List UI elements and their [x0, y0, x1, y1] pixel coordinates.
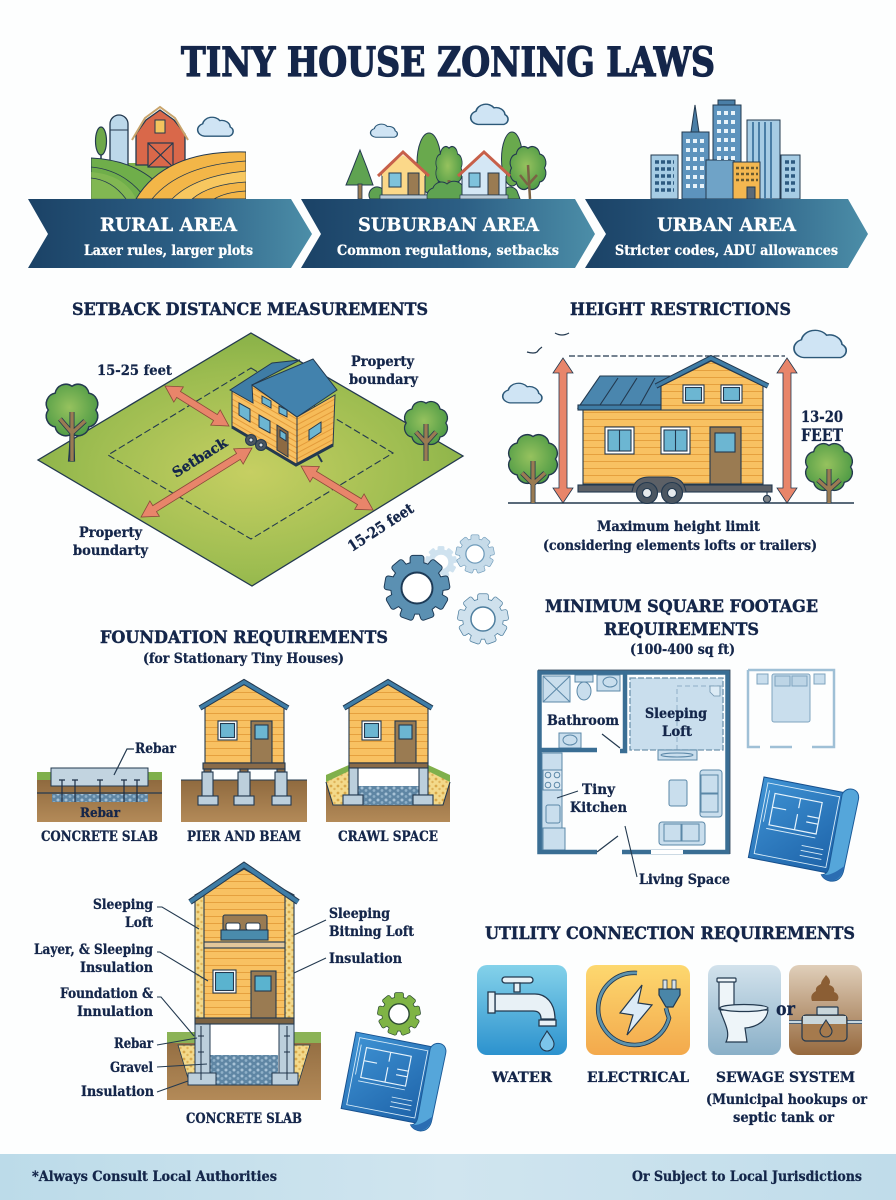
title: TINY HOUSE ZONING LAWS	[181, 39, 715, 86]
label: sewage system: septic tank or	[733, 1110, 835, 1126]
left labels	[34, 897, 154, 1100]
heading: height restrictions: HEIGHT RESTRICTIONS	[570, 300, 791, 320]
panel: crawl space foundation	[326, 682, 450, 845]
tree right	[405, 402, 447, 461]
heading: foundation requirements: (for Stationary Tiny Houses)	[143, 651, 344, 667]
ground line	[508, 502, 854, 504]
sleeping loft area	[630, 678, 723, 750]
arrow: setback top	[160, 378, 234, 434]
panel: concrete slab foundation: Rebar	[135, 741, 177, 757]
label: property boundary	[349, 354, 419, 388]
room labels: Living Space	[639, 872, 730, 888]
heading: minimum square footage: (100-400 sq ft)	[630, 642, 735, 658]
panel: height diagram	[503, 330, 854, 554]
banner: rural area: Laxer rules, larger plots	[84, 243, 253, 259]
label: property boundary: boundary	[349, 372, 419, 388]
footer band	[0, 1154, 896, 1200]
arrow: height left	[553, 358, 573, 503]
banner: rural area	[28, 199, 312, 268]
footer band: *Always Consult Local Authorities	[32, 1169, 277, 1185]
panel: concrete slab foundation: CONCRETE SLAB	[41, 829, 158, 845]
icon: electrical plug	[586, 965, 690, 1055]
arrow: setback right	[296, 458, 378, 518]
panel: pier and beam foundation: PIER AND BEAM	[187, 829, 301, 845]
label: sewage system: SEWAGE SYSTEM	[716, 1070, 855, 1086]
door swings	[597, 734, 620, 852]
panel: crawl space foundation: CRAWL SPACE	[338, 829, 438, 845]
house side view	[578, 358, 772, 504]
fixtures	[542, 675, 722, 850]
banner: rural area: RURAL AREA	[100, 214, 237, 236]
birds	[527, 333, 569, 353]
room labels: Kitchen	[570, 800, 627, 816]
panel: concrete slab foundation	[37, 741, 177, 845]
right labels: Bitning Loft	[329, 924, 414, 940]
banner: urban area	[585, 199, 868, 268]
walls	[538, 672, 728, 852]
tiny house isometric	[230, 359, 337, 465]
arrow: setback left	[136, 440, 257, 525]
label: sewage system: (Municipal hookups or	[706, 1092, 868, 1108]
heading: utility connection: UTILITY CONNECTION REQUIREMENTS	[485, 924, 855, 944]
banner: urban area: URBAN AREA	[657, 214, 796, 236]
right labels	[329, 906, 414, 967]
caption: height limit: Maximum height limit	[597, 519, 760, 535]
icon: rural scene	[91, 107, 246, 199]
label: 15-25 feet bottom: 15-25 feet	[344, 499, 417, 555]
icon: green gear	[378, 993, 420, 1035]
left labels: Sleeping	[93, 897, 153, 913]
heading: foundation requirements: FOUNDATION REQUIREMENTS	[100, 628, 388, 648]
left labels: Loft	[125, 915, 153, 931]
label: electrical: ELECTRICAL	[587, 1070, 689, 1086]
room labels: Loft	[662, 724, 693, 740]
heading: minimum square footage: REQUIREMENTS	[604, 620, 759, 640]
label: 13-20 feet: 13-20	[801, 407, 843, 426]
foundation stem walls	[188, 1024, 298, 1085]
heading: foundation requirements	[100, 628, 388, 667]
banner: suburban area	[301, 199, 595, 268]
tree left	[46, 384, 98, 461]
ground and trench	[167, 1024, 321, 1100]
label: water: WATER	[491, 1070, 552, 1086]
icon: small bedroom plan	[748, 670, 834, 747]
heading: minimum square footage	[545, 597, 818, 658]
panel: concrete slab foundation: Rebar	[80, 806, 120, 821]
left labels: Rebar	[114, 1036, 154, 1052]
arrow: height right	[777, 358, 797, 503]
footer band: Or Subject to Local Jurisdictions	[632, 1169, 862, 1185]
room labels: Tiny	[582, 782, 616, 798]
dashed setback line	[108, 368, 393, 539]
room labels: Sleeping	[645, 706, 707, 722]
label: 15-25 feet top: 15-25 feet	[97, 363, 173, 379]
icon: suburban scene	[346, 104, 546, 199]
icon: blueprint bottom	[340, 1027, 447, 1133]
label: property boundarty	[73, 525, 149, 559]
left labels: Gravel	[110, 1060, 153, 1076]
panel: floor plan	[538, 670, 730, 888]
right labels: Sleeping	[329, 906, 390, 922]
icon: water faucet	[477, 965, 567, 1055]
banner: suburban area: Common regulations, setbacks	[337, 243, 559, 259]
icon: septic tank	[789, 965, 862, 1055]
label: property boundary: Property	[351, 354, 415, 370]
leaders	[557, 791, 637, 877]
caption: CONCRETE SLAB	[186, 1111, 302, 1127]
banner: urban area: Stricter codes, ADU allowances	[615, 243, 838, 259]
left labels: Innulation	[77, 1004, 153, 1020]
room labels	[547, 706, 730, 888]
lot diamond	[38, 333, 463, 586]
label: property boundarty: boundarty	[73, 543, 149, 559]
room labels: Bathroom	[547, 713, 619, 729]
heading: minimum square footage: MINIMUM SQUARE FOOTAGE	[545, 597, 818, 617]
label: property boundarty: Property	[79, 525, 143, 541]
caption: height limit: (considering elements lofts or trailers)	[543, 538, 817, 554]
house body	[190, 865, 298, 1024]
leader lines	[157, 907, 326, 1092]
left labels: Layer, & Sleeping	[34, 942, 153, 958]
clouds	[503, 330, 846, 403]
right labels: Insulation	[329, 951, 402, 967]
label: sewage system	[706, 1070, 868, 1126]
icon: blueprint top right	[747, 772, 860, 883]
trees	[509, 435, 852, 503]
icon: gears	[384, 535, 508, 644]
panel: section cutaway house	[34, 865, 414, 1127]
panel: pier and beam foundation	[181, 682, 307, 845]
icon: toilet	[708, 965, 781, 1055]
panel: setback diagram	[38, 333, 463, 586]
label: setback: Setback	[170, 435, 231, 481]
label: 13-20 feet: FEET	[801, 426, 843, 446]
label: or: or	[776, 998, 796, 1020]
heading: setback distance: SETBACK DISTANCE MEASUREMENTS	[72, 300, 428, 320]
caption: height limit	[543, 519, 817, 554]
left labels: Insulation	[81, 1084, 154, 1100]
label: 13-20 feet	[801, 407, 843, 446]
icon: urban skyline	[651, 100, 800, 199]
left labels: Insulation	[80, 960, 153, 976]
dashed height limit	[569, 355, 785, 357]
banner: suburban area: SUBURBAN AREA	[358, 214, 539, 236]
left labels: Foundation &	[60, 986, 153, 1002]
